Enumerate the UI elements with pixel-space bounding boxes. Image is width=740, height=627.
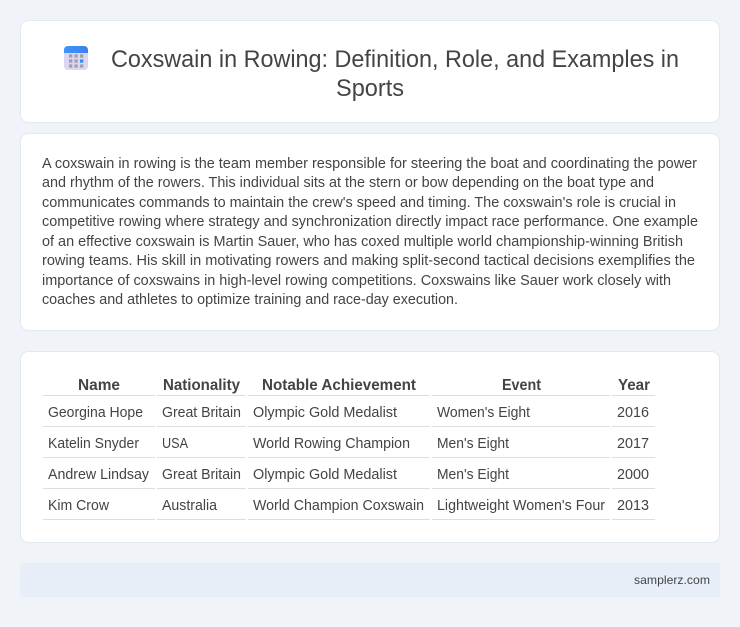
panel: title — [20, 20, 720, 122]
text block: description: and rhythm of the rowers. This individual sits at the stern or bow depending on the boat type and — [42, 175, 654, 191]
panel: description — [20, 134, 720, 330]
table row: Katelin Snyder: USA — [162, 436, 188, 452]
table row: Georgina Hope: Georgina Hope — [48, 405, 143, 421]
table header: Nationality — [163, 377, 240, 394]
heading: Sports — [336, 75, 404, 102]
text block: description: rowing teams. His skill in motivating rowers and making split-second tactical decisions exemplifies the — [42, 253, 695, 269]
heading: Coxswain in Rowing: Definition, Role, and Examples in — [111, 46, 679, 73]
text block: description: communicates commands to maintain the crew's speed and timing. The coxswain's role is crucial in — [42, 195, 676, 211]
table row: Georgina Hope — [48, 405, 649, 421]
table row: Katelin Snyder: World Rowing Champion — [253, 436, 410, 452]
table row: Andrew Lindsay — [48, 467, 649, 483]
icon: calendar — [64, 46, 88, 70]
table row: Kim Crow: World Champion Coxswain — [253, 498, 424, 514]
table row: Katelin Snyder: Katelin Snyder — [48, 436, 139, 452]
table header — [78, 377, 650, 394]
table row: Andrew Lindsay: Great Britain — [162, 467, 241, 483]
table row: Andrew Lindsay: 2000 — [617, 467, 649, 483]
table row: Georgina Hope: Great Britain — [162, 405, 241, 421]
footer — [20, 563, 720, 597]
table row: Kim Crow: Kim Crow — [48, 498, 110, 514]
table row: Georgina Hope: Women's Eight — [437, 405, 530, 421]
table row: Georgina Hope: 2016 — [617, 405, 649, 421]
text block: description — [42, 156, 698, 308]
text block: description: competitive rowing where strategy and synchronization directly impact race performance. One example — [42, 214, 698, 230]
table header: Notable Achievement — [262, 377, 417, 394]
table row: Kim Crow — [48, 498, 649, 514]
text block: description: importance of coxswains in high-level rowing competitions. Coxswains like Sauer work closely with — [42, 273, 671, 289]
table row: Katelin Snyder: Men's Eight — [437, 436, 509, 452]
table grid lines — [43, 395, 655, 520]
panel: table — [20, 352, 720, 542]
text block: description: coaches and athletes to optimize training and race-day execution. — [42, 292, 458, 308]
table row: Katelin Snyder — [48, 436, 649, 452]
table row: Kim Crow: 2013 — [617, 498, 649, 514]
table header: Event — [502, 377, 542, 394]
table row: Andrew Lindsay: Olympic Gold Medalist — [253, 467, 397, 483]
table header: Name — [78, 377, 120, 394]
text block: description: A coxswain in rowing is the team member responsible for steering the boat and coordinating the power — [42, 156, 697, 172]
table row: Katelin Snyder: 2017 — [617, 436, 649, 452]
table row: Andrew Lindsay: Men's Eight — [437, 467, 509, 483]
table header: Year — [618, 377, 650, 394]
heading — [111, 46, 679, 102]
table row: Andrew Lindsay: Andrew Lindsay — [48, 467, 150, 483]
table row: Kim Crow: Lightweight Women's Four — [437, 498, 605, 514]
table row: Georgina Hope: Olympic Gold Medalist — [253, 405, 397, 421]
text block: description: of an effective coxswain is Martin Sauer, who has coxed multiple world championship-winning British — [42, 234, 683, 250]
footer text: samplerz.com — [634, 573, 710, 587]
table row: Kim Crow: Australia — [162, 498, 217, 514]
